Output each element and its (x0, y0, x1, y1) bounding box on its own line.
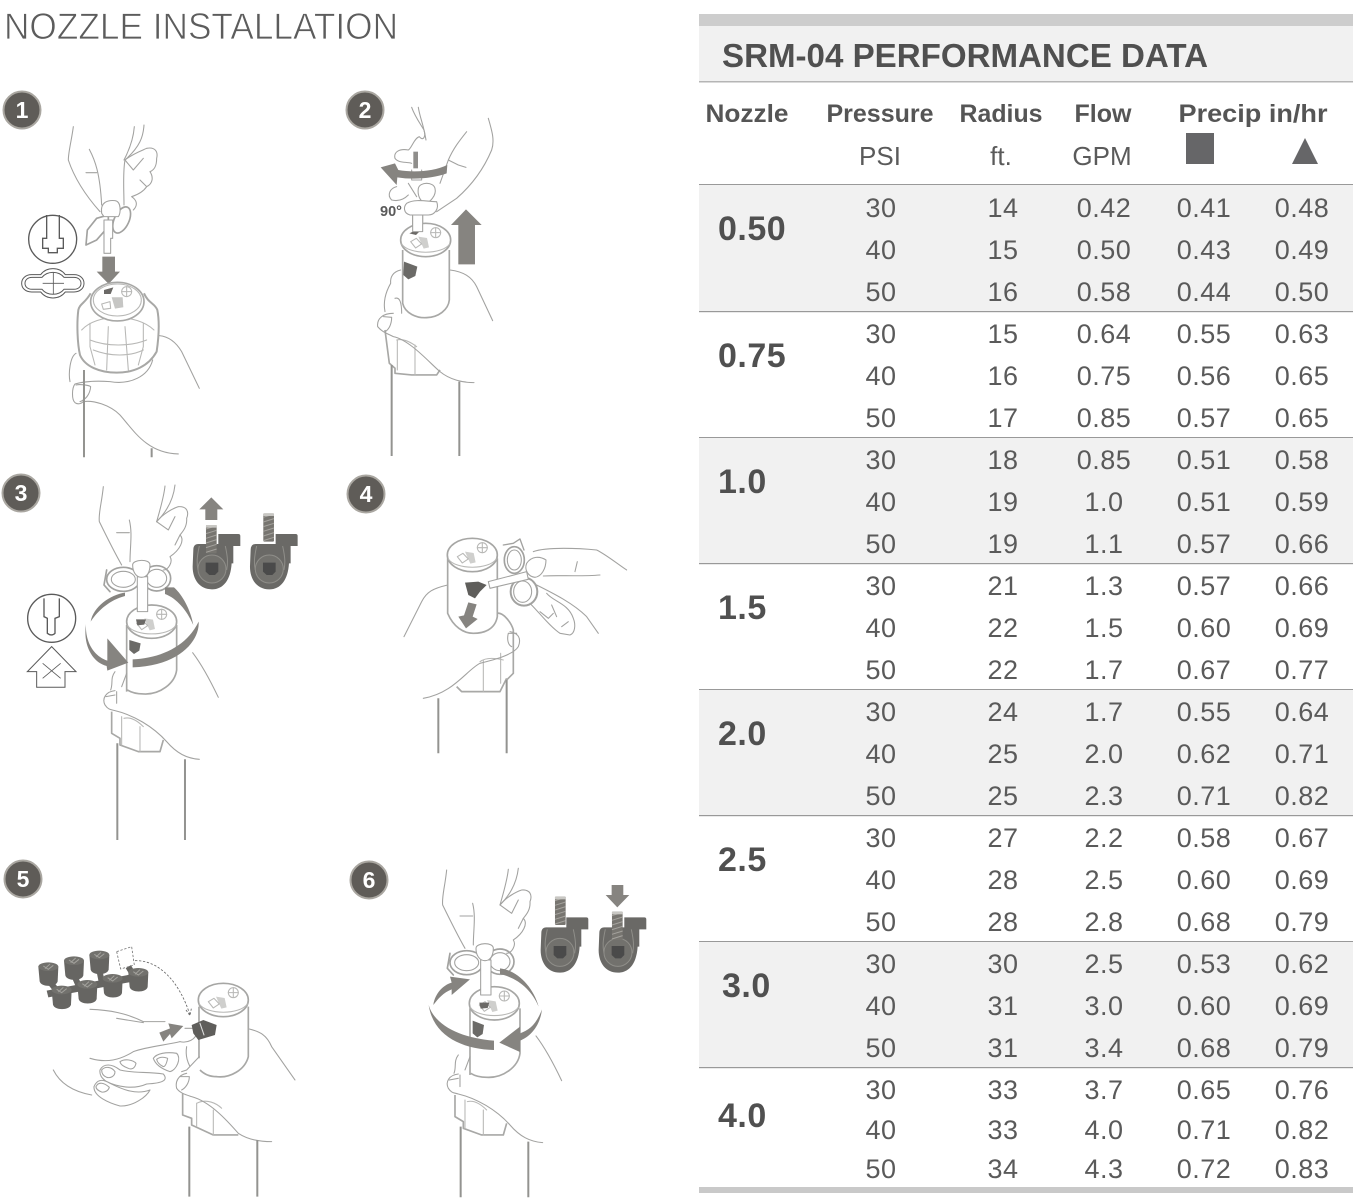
step 2 badge (346, 92, 384, 128)
nozzle 1.0 rows: 30 (865, 445, 897, 475)
column headers: ft. (990, 141, 1012, 171)
step 6 badge (350, 862, 388, 898)
nozzle 1.5 rows: 50 (865, 655, 897, 685)
nozzle 0.75 rows: 0.56 (1177, 361, 1231, 391)
nozzle 0.50 rows: 0.44 (1177, 277, 1231, 307)
step 1 badge: 1 (16, 97, 29, 123)
nozzle 0.75 rows: 50 (865, 403, 897, 433)
nozzle 1.0 rows: 0.57 (1177, 529, 1231, 559)
nozzle 2.5 rows: 2.5 (718, 841, 767, 879)
nozzle 2.5 rows: 0.60 (1177, 865, 1231, 895)
nozzle 4.0 rows: 33 (987, 1075, 1019, 1105)
nozzle 1.5 rows: 0.69 (1275, 613, 1329, 643)
arrows: clockwise rotation (85, 587, 199, 671)
step 5 badge (4, 860, 42, 898)
nozzle 4.0 rows: 4.0 (718, 1097, 767, 1135)
arrows: counter-clockwise rotation (429, 968, 542, 1052)
nozzle 2.0 rows: 24 (987, 697, 1019, 727)
nozzle 2.0 rows: 0.71 (1177, 781, 1231, 811)
nozzle 3.0 rows: 0.69 (1275, 991, 1329, 1021)
icon: slot outline (22, 269, 84, 298)
nozzle 2.5 rows: 2.2 (1084, 823, 1124, 853)
nozzle 1.0 rows: 0.58 (1275, 445, 1329, 475)
step 1 drawing (22, 125, 199, 457)
nozzle 0.75 rows: 0.65 (1275, 361, 1329, 391)
nozzle 2.0 rows: 2.3 (1084, 781, 1124, 811)
nozzle 1.5 rows: 40 (865, 613, 897, 643)
nozzle 1.5 rows: 0.66 (1275, 571, 1329, 601)
step 1 illustration (4, 92, 199, 457)
nozzle 2.5 rows: 30 (865, 823, 897, 853)
nozzle 1.0 rows: 18 (987, 445, 1019, 475)
nozzle 2.5 rows: 0.67 (1275, 823, 1329, 853)
nozzle 4.0 rows: 4.3 (1084, 1154, 1124, 1184)
nozzle 2.0 rows: 0.55 (1177, 697, 1231, 727)
nozzle 4.0 rows (718, 1075, 1329, 1184)
nozzle 2.0 rows: 40 (865, 739, 897, 769)
nozzle 2.5 rows: 0.68 (1177, 907, 1231, 937)
arrow: down (97, 257, 120, 284)
nozzle 3.0 rows (699, 942, 1353, 1067)
arrow: down (458, 602, 478, 628)
nozzle 3.0 rows: 50 (865, 1033, 897, 1063)
nozzle 2.0 rows: 30 (865, 697, 897, 727)
nozzle 2.5 rows: 27 (987, 823, 1019, 853)
nozzle 2.5 rows: 40 (865, 865, 897, 895)
step 1 badge (4, 92, 40, 128)
nozzle 4.0 rows: 0.72 (1177, 1154, 1231, 1184)
step 4 badge (348, 476, 384, 512)
table heading band: SRM-04 PERFORMANCE DATA (722, 37, 1208, 74)
arrow: up (451, 209, 482, 264)
nozzle 0.75 rows: 0.64 (1077, 319, 1131, 349)
step 4 illustration (348, 476, 627, 753)
nozzle 0.50 rows: 0.50 (718, 210, 786, 248)
step 6 illustration (350, 862, 646, 1197)
title: nozzle installation: NOZZLE INSTALLATION (4, 6, 398, 47)
dashed arc arrow (135, 961, 191, 1016)
nozzle 2.5 rows: 0.58 (1177, 823, 1231, 853)
nozzle 0.50 rows: 0.49 (1275, 235, 1329, 265)
step 3 badge: 3 (15, 480, 27, 506)
nozzle 3.0 rows: 0.60 (1177, 991, 1231, 1021)
nozzle 2.0 rows: 0.62 (1177, 739, 1231, 769)
nozzle 2.5 rows: 28 (987, 907, 1019, 937)
nozzle 1.5 rows: 0.67 (1177, 655, 1231, 685)
nozzle 2.5 rows: 2.8 (1084, 907, 1124, 937)
step 5 badge: 5 (17, 866, 30, 892)
nozzle 0.50 rows (699, 185, 1353, 311)
nozzle 0.50 rows: 0.50 (1077, 235, 1131, 265)
nozzle 3.0 rows: 3.0 (1084, 991, 1124, 1021)
nozzle 0.75 rows (718, 319, 1329, 433)
nozzle 2.5 rows: 0.69 (1275, 865, 1329, 895)
nozzle 0.50 rows: 15 (987, 235, 1019, 265)
nozzle 3.0 rows: 31 (987, 991, 1019, 1021)
nozzle 1.0 rows: 0.66 (1275, 529, 1329, 559)
nozzle 0.75 rows: 0.55 (1177, 319, 1231, 349)
nozzle 2.0 rows: 0.71 (1275, 739, 1329, 769)
column headers: Radius (960, 100, 1042, 128)
nozzle 1.5 rows: 1.7 (1084, 655, 1124, 685)
nozzle 0.50 rows: 0.58 (1077, 277, 1131, 307)
nozzle 0.50 rows: 30 (865, 193, 897, 223)
nozzle 2.0 rows: 2.0 (1084, 739, 1124, 769)
nozzle 3.0 rows: 30 (865, 949, 897, 979)
arrow: toward riser (159, 1023, 183, 1042)
nozzle 1.0 rows: 0.51 (1177, 487, 1231, 517)
nozzle 3.0 rows: 0.68 (1177, 1033, 1231, 1063)
nozzle 2.0 rows: 50 (865, 781, 897, 811)
step 2 drawing (378, 107, 493, 456)
nozzle 4.0 rows: 33 (987, 1115, 1019, 1145)
nozzle 2.0 rows: 1.7 (1084, 697, 1124, 727)
column headers: Precip in/hr (1178, 100, 1328, 128)
step 2 illustration (346, 92, 493, 456)
nozzle 4.0 rows: 0.83 (1275, 1154, 1329, 1184)
nozzle 0.75 rows: 0.85 (1077, 403, 1131, 433)
nozzle 0.75 rows: 15 (987, 319, 1019, 349)
nozzle 1.0 rows: 0.85 (1077, 445, 1131, 475)
nozzle 4.0 rows: 3.7 (1084, 1075, 1124, 1105)
nozzle 0.50 rows: 50 (865, 277, 897, 307)
nozzle 2.5 rows: 2.5 (1084, 865, 1124, 895)
nozzle 1.5 rows: 30 (865, 571, 897, 601)
step 3 drawing (27, 485, 298, 840)
column headers: PSI (859, 141, 901, 171)
nozzle 2.0 rows: 2.0 (718, 715, 767, 753)
left hand with nozzle (53, 1009, 217, 1106)
nozzle 4.0 rows: 0.82 (1275, 1115, 1329, 1145)
nozzle 0.50 rows: 0.41 (1177, 193, 1231, 223)
nozzle 2.0 rows (699, 690, 1353, 815)
nozzle 3.0 rows: 40 (865, 991, 897, 1021)
icon: key tip in circle (29, 215, 77, 263)
step 5 illustration (4, 860, 295, 1197)
nozzle 4.0 rows: 34 (987, 1154, 1019, 1184)
nozzle 0.75 rows: 40 (865, 361, 897, 391)
column headers: Nozzle (706, 100, 789, 128)
nozzle 0.75 rows: 30 (865, 319, 897, 349)
nozzle 0.75 rows: 16 (987, 361, 1019, 391)
nozzle 1.0 rows: 1.1 (1084, 529, 1124, 559)
step 3 illustration (2, 474, 298, 840)
nozzle 1.0 rows: 50 (865, 529, 897, 559)
icon: hex tip in circle (28, 594, 76, 642)
nozzle 1.5 rows: 1.5 (1084, 613, 1124, 643)
nozzle 1.5 rows: 1.3 (1084, 571, 1124, 601)
nozzle 0.75 rows: 0.75 (1077, 361, 1131, 391)
nozzle 2.5 rows (718, 823, 1329, 937)
nozzle 1.5 rows: 0.60 (1177, 613, 1231, 643)
column headers (706, 100, 1328, 171)
column headers: Pressure (826, 100, 934, 128)
step 4 drawing (404, 538, 627, 753)
column headers: GPM (1072, 141, 1132, 171)
nozzle 1.5 rows: 1.5 (718, 589, 767, 627)
nozzle 1.0 rows: 1.0 (1084, 487, 1124, 517)
nozzle 2.5 rows: 50 (865, 907, 897, 937)
nozzle 4.0 rows: 0.65 (1177, 1075, 1231, 1105)
nozzle 1.5 rows: 22 (987, 655, 1019, 685)
nozzle 0.50 rows: 40 (865, 235, 897, 265)
nozzle 0.75 rows: 0.65 (1275, 403, 1329, 433)
nozzle 0.50 rows: 0.42 (1077, 193, 1131, 223)
nozzle 1.5 rows (718, 571, 1329, 685)
nozzle 3.0 rows: 2.5 (1084, 949, 1124, 979)
nozzle 4.0 rows: 0.71 (1177, 1115, 1231, 1145)
column headers: Flow (1074, 100, 1132, 128)
step 6 drawing (429, 868, 646, 1197)
table bottom bar (699, 1187, 1353, 1193)
nozzle 3.0 rows: 0.79 (1275, 1033, 1329, 1063)
nozzle 0.75 rows: 17 (987, 403, 1019, 433)
nozzle 4.0 rows: 50 (865, 1154, 897, 1184)
nozzle 2.5 rows: 28 (987, 865, 1019, 895)
icon: up arrow crossed out (27, 647, 76, 687)
nozzle 0.50 rows: 0.43 (1177, 235, 1231, 265)
nozzle 0.50 rows: 0.50 (1275, 277, 1329, 307)
nozzle 1.0 rows (699, 438, 1353, 563)
nozzle 0.75 rows: 0.57 (1177, 403, 1231, 433)
panel: performance table (699, 14, 1353, 1193)
nozzle 2.0 rows: 25 (987, 739, 1019, 769)
nozzle 3.0 rows: 3.0 (722, 967, 771, 1005)
nozzle 1.5 rows: 22 (987, 613, 1019, 643)
nozzle 1.0 rows: 0.59 (1275, 487, 1329, 517)
nozzle 0.50 rows: 16 (987, 277, 1019, 307)
nozzle 3.0 rows: 30 (987, 949, 1019, 979)
nozzles: screw lowered (541, 885, 646, 973)
step 3 badge (2, 474, 40, 512)
nozzle 0.75 rows: 0.75 (718, 337, 786, 375)
nozzle 4.0 rows: 4.0 (1084, 1115, 1124, 1145)
nozzle 0.50 rows: 14 (987, 193, 1019, 223)
nozzle 1.5 rows: 0.57 (1177, 571, 1231, 601)
nozzle 2.0 rows: 0.82 (1275, 781, 1329, 811)
nozzle 2.0 rows: 25 (987, 781, 1019, 811)
nozzle 3.0 rows: 0.53 (1177, 949, 1231, 979)
step 5 drawing (38, 947, 295, 1197)
table heading band (699, 26, 1353, 82)
nozzle 3.0 rows: 0.62 (1275, 949, 1329, 979)
nozzle 0.50 rows: 0.48 (1275, 193, 1329, 223)
step 2 badge: 2 (359, 97, 371, 123)
nozzles: screw raised (193, 497, 298, 589)
nozzle 1.0 rows: 19 (987, 487, 1019, 517)
step 6 badge: 6 (363, 867, 375, 893)
nozzle 2.5 rows: 0.79 (1275, 907, 1329, 937)
nozzle 1.5 rows: 21 (987, 571, 1019, 601)
nozzle 1.5 rows: 0.77 (1275, 655, 1329, 685)
nozzle 2.0 rows: 0.64 (1275, 697, 1329, 727)
table top bar (699, 14, 1353, 26)
nozzle 3.0 rows: 31 (987, 1033, 1019, 1063)
label: 90 degrees: 90° (380, 204, 402, 220)
nozzle tree (38, 947, 148, 1009)
nozzle 1.0 rows: 1.0 (718, 463, 767, 501)
nozzle 3.0 rows: 3.4 (1084, 1033, 1124, 1063)
nozzle 4.0 rows: 0.76 (1275, 1075, 1329, 1105)
arrow: rotate 90 degrees (381, 163, 447, 185)
nozzle 4.0 rows: 30 (865, 1075, 897, 1105)
nozzle 1.0 rows: 0.51 (1177, 445, 1231, 475)
nozzle 1.0 rows: 19 (987, 529, 1019, 559)
nozzle 0.75 rows: 0.63 (1275, 319, 1329, 349)
nozzle 1.0 rows: 40 (865, 487, 897, 517)
nozzle 4.0 rows: 40 (865, 1115, 897, 1145)
step 4 badge: 4 (360, 481, 373, 507)
